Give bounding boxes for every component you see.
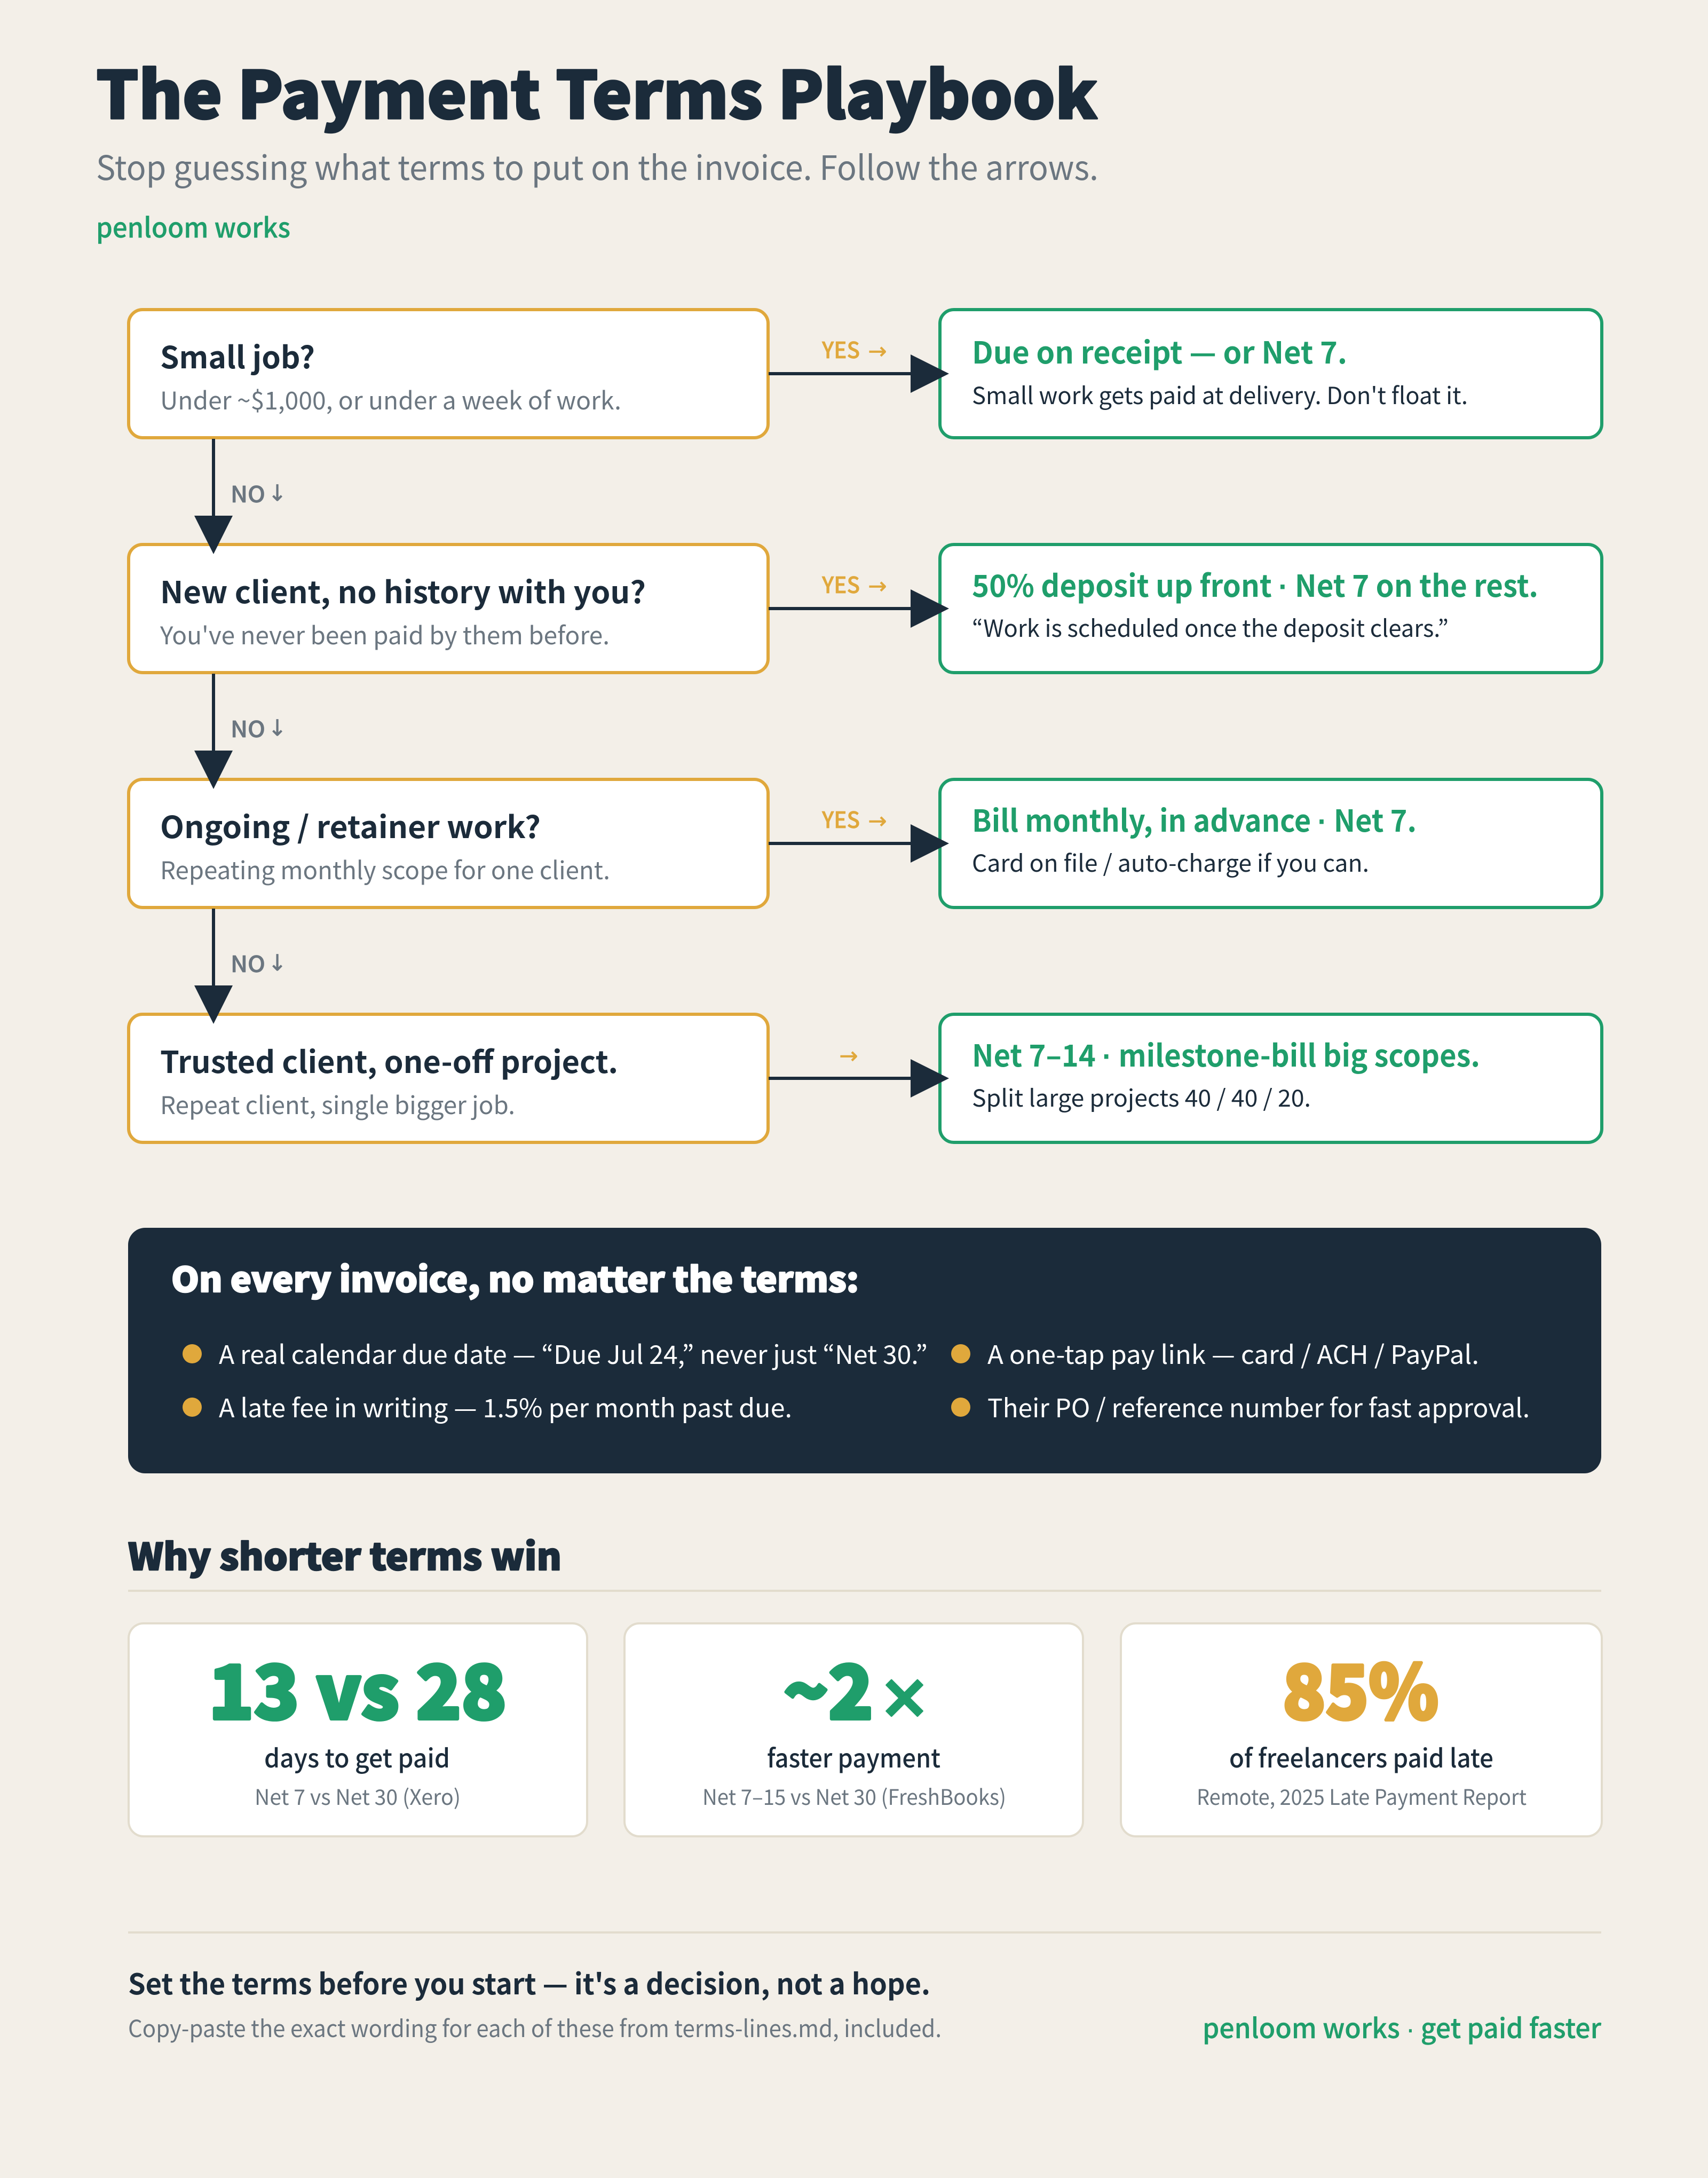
yes arrow: → [868,338,887,364]
answer: milestone billing: Split large projects 40 / 40 / 20. [972,1079,1311,1114]
question: new client: New client, no history with you? [160,569,646,612]
stat card: 85 percent: of freelancers paid late [1229,1738,1493,1775]
no arrow 1: ↓ [268,480,287,506]
answer: due on receipt [940,310,1602,438]
no arrow 3 [194,909,287,1024]
yes arrow: YES [821,802,860,835]
question: new client [129,544,768,673]
footer note: Copy-paste the exact wording for each of these from terms-lines.md, included. [128,2010,942,2044]
stat card: 2x faster: faster payment [767,1738,940,1775]
stat card: 2x faster: Net 7–15 vs Net 30 (FreshBooks) [702,1780,1006,1811]
no arrow 3: NO [231,946,265,979]
subtitle: Stop guessing what terms to put on the invoice. Follow the arrows. [96,141,1098,190]
question: small job [129,310,768,438]
stat card: 13 vs 28: 13 vs 28 [209,1634,507,1741]
question: new client: You've never been paid by them before. [160,617,610,652]
stat card: 85 percent: 85% [1283,1634,1438,1741]
stat card: 13 vs 28: Net 7 vs Net 30 (Xero) [255,1780,461,1811]
yes arrow [769,802,949,863]
answer: deposit [940,544,1602,673]
question: small job: Small job? [160,334,315,377]
footer headline: Set the terms before you start — it's a decision, not a hope. [128,1961,930,2003]
stat card: 2x faster: × [879,1661,930,1732]
answer: bill monthly [940,779,1602,908]
no arrow 1 [194,439,287,554]
stat card: 2x faster: ~2 [784,1634,873,1741]
answer: deposit: 50% deposit up front · Net 7 on the rest. [972,562,1538,606]
answer: deposit: “Work is scheduled once the deposit clears.” [972,610,1449,644]
panel: on every invoice [128,1228,1601,1473]
arrow: → [839,1043,858,1069]
question: retainer: Ongoing / retainer work? [160,803,541,847]
title: The Payment Terms Playbook [96,43,1097,138]
stat card: 85 percent: Remote, 2025 Late Payment Report [1197,1780,1527,1811]
question: trusted client: Trusted client, one-off project. [160,1038,618,1082]
stat card: 13 vs 28 [129,1623,587,1836]
answer: milestone billing [940,1014,1602,1142]
checklist item: late fee: A late fee in writing — 1.5% per month past due. [219,1387,792,1425]
checklist item: pay link: A one-tap pay link — card / ACH / PayPal. [987,1334,1479,1371]
yes arrow: YES [821,333,860,365]
answer: bill monthly: Card on file / auto-charge if you can. [972,845,1369,879]
checklist item: due date: A real calendar due date — “Due Jul 24,” never just “Net 30.” [219,1334,928,1371]
section heading: why shorter terms win: Why shorter terms win [128,1527,562,1581]
decision row 1 [129,310,1602,438]
question: retainer [129,779,768,908]
decision row 4 [129,1014,1602,1142]
no arrow 2: NO [231,712,265,744]
answer: milestone billing: Net 7–14 · milestone-bill big scopes. [972,1032,1480,1076]
yes arrow: → [868,808,887,834]
footer brand: penloom works · get paid faster [1203,2007,1601,2046]
decision row 2 [129,544,1602,673]
no arrow 2: ↓ [268,715,287,741]
question: trusted client: Repeat client, single bigger job. [160,1086,515,1122]
panel heading: On every invoice, no matter the terms: [171,1253,859,1302]
no arrow 2 [194,674,287,789]
brand label: penloom works [96,206,290,246]
yes arrow: YES [821,567,860,600]
answer: due on receipt: Due on receipt — or Net 7. [972,329,1347,373]
stat card: 2x faster [624,1623,1083,1836]
no arrow 1: NO [231,477,265,509]
question: retainer: Repeating monthly scope for one client. [160,851,610,887]
checklist item: PO number: Their PO / reference number for fast approval. [987,1387,1530,1425]
yes arrow [769,567,949,628]
answer: bill monthly: Bill monthly, in advance · Net 7. [972,797,1417,841]
no arrow 3: ↓ [268,950,287,976]
question: trusted client [129,1014,768,1142]
arrow [769,1043,949,1098]
stat card: 13 vs 28: days to get paid [264,1738,450,1775]
answer: due on receipt: Small work gets paid at delivery. Don't float it. [972,377,1468,411]
decision row 3 [129,779,1602,908]
question: small job: Under ~$1,000, or under a week of work. [160,382,621,417]
stat card: 85 percent [1121,1623,1602,1836]
yes arrow [769,333,949,393]
yes arrow: → [868,573,887,599]
